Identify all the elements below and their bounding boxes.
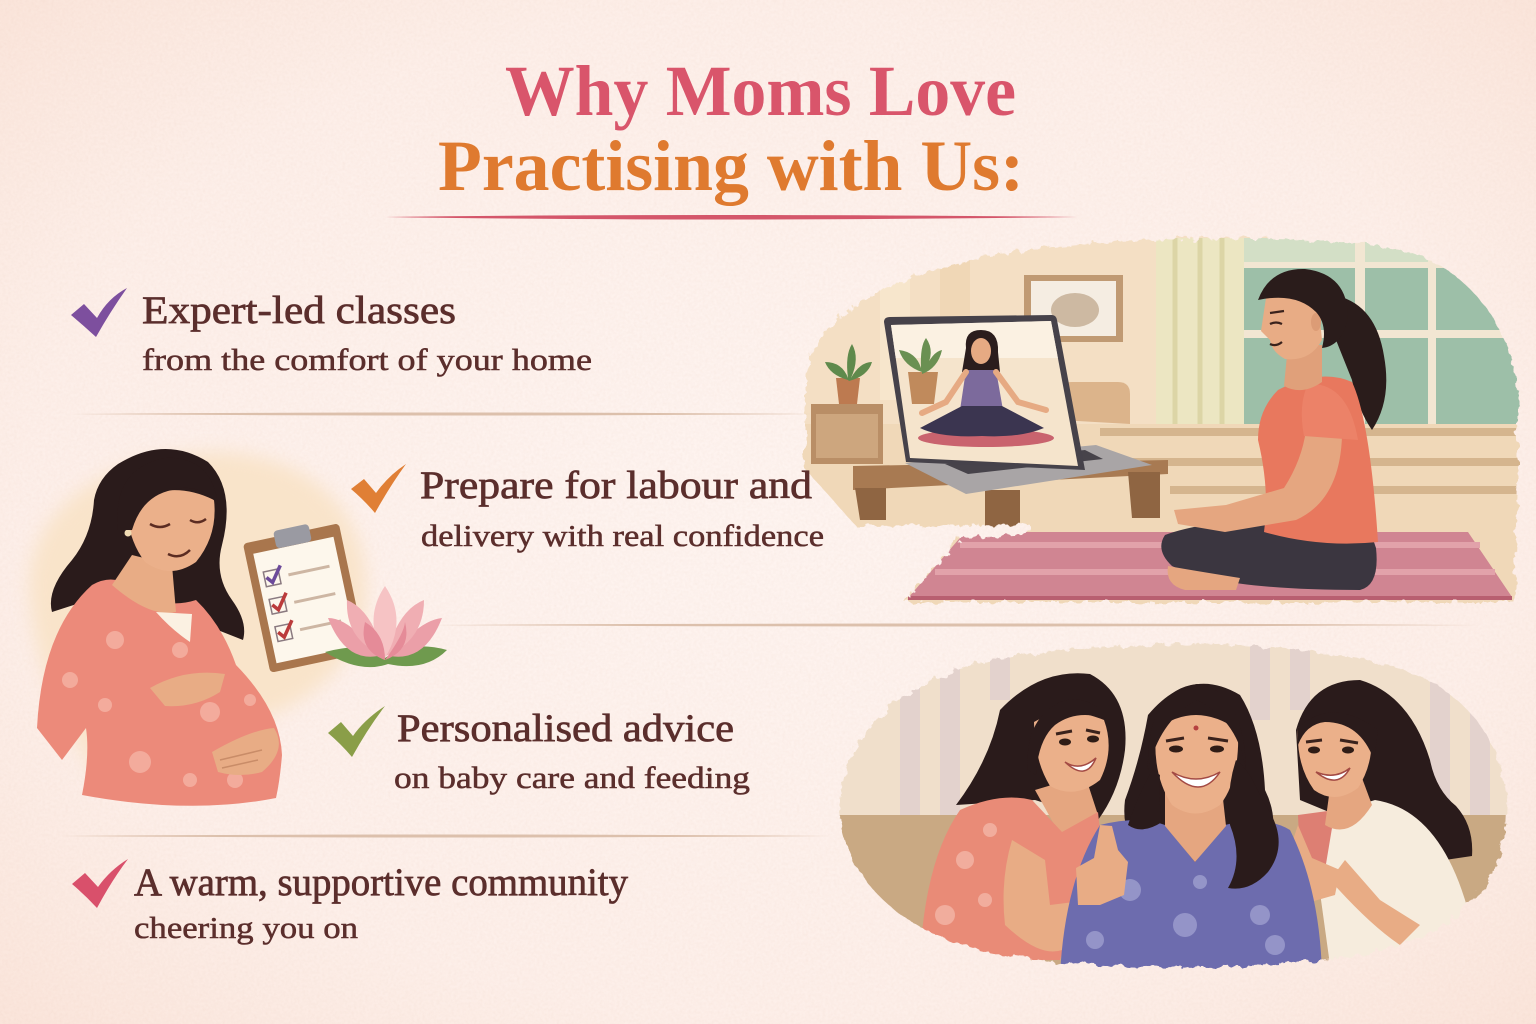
low table	[853, 460, 1168, 530]
closed eyes and smile	[150, 519, 206, 556]
laptop screen with instructor	[891, 321, 1078, 466]
curtain	[1240, 238, 1244, 424]
wall picture	[1024, 275, 1123, 342]
side cabinet with plant	[811, 344, 883, 464]
item 2: labour and delivery	[351, 464, 824, 553]
item 3: personalised advice	[328, 706, 750, 795]
kurta florals	[62, 631, 256, 788]
foot	[1168, 566, 1240, 590]
clipboard	[242, 517, 366, 673]
hands on belly	[150, 673, 279, 775]
lotus	[325, 586, 447, 667]
face	[1261, 292, 1322, 359]
divider 3	[60, 834, 830, 838]
sofa	[1068, 382, 1130, 424]
check: pink	[72, 859, 128, 908]
scene: three smiling moms	[830, 635, 1520, 975]
item 3: personalised advice: on baby care and feeding	[394, 760, 750, 795]
scene: mom following online class	[800, 230, 1520, 605]
hair back	[51, 449, 244, 640]
item 4: supportive community: cheering you on	[134, 910, 359, 945]
sleeve	[1302, 384, 1358, 440]
divider 1	[70, 412, 812, 416]
center mom hair over shoulders	[1128, 760, 1279, 889]
eye, brow and lips	[1270, 311, 1284, 345]
scene: pregnant woman with checklist and lotus	[29, 449, 447, 806]
laptop	[884, 315, 1152, 494]
title line 2: Practising with Us:	[438, 126, 1024, 206]
neck and neckline	[112, 555, 176, 613]
check: orange	[351, 464, 406, 513]
item 1: expert-led classes	[71, 288, 592, 377]
title line 1: Why Moms Love	[505, 51, 1016, 131]
neck	[1284, 345, 1322, 390]
ponytail	[1332, 296, 1386, 430]
title underline	[385, 215, 1078, 220]
window	[1240, 238, 1520, 428]
crossed legs	[1161, 525, 1377, 590]
right mom	[1283, 680, 1472, 965]
ear	[1311, 313, 1321, 331]
item 1: expert-led classes: from the comfort of your home	[142, 342, 592, 377]
earring	[124, 530, 132, 536]
divider 2	[430, 624, 1480, 626]
left mom kurta florals	[935, 823, 997, 925]
hair top	[117, 458, 218, 530]
item 3: personalised advice: Personalised advice	[397, 707, 734, 750]
check: purple	[71, 288, 127, 337]
cream backdrop	[29, 452, 366, 780]
sofa	[830, 815, 1520, 975]
yoga mat	[908, 532, 1512, 598]
kurta	[37, 580, 282, 806]
shirt	[1258, 377, 1378, 544]
item 4: supportive community	[72, 859, 628, 945]
face	[126, 490, 215, 571]
room wall	[804, 236, 1320, 605]
hair	[1258, 269, 1348, 348]
item 4: supportive community: A warm, supportive community	[134, 861, 628, 904]
floor	[800, 424, 1520, 604]
left mom	[920, 673, 1126, 960]
arm	[1174, 430, 1342, 532]
item 1: expert-led classes: Expert-led classes	[142, 289, 456, 332]
room backdrop	[839, 642, 1508, 815]
seated woman	[1161, 269, 1386, 590]
center mom	[1060, 684, 1322, 975]
item 2: labour and delivery: delivery with real confidence	[421, 518, 824, 553]
item 2: labour and delivery: Prepare for labour and	[420, 464, 813, 507]
check: green	[328, 706, 385, 757]
title	[438, 51, 1024, 206]
